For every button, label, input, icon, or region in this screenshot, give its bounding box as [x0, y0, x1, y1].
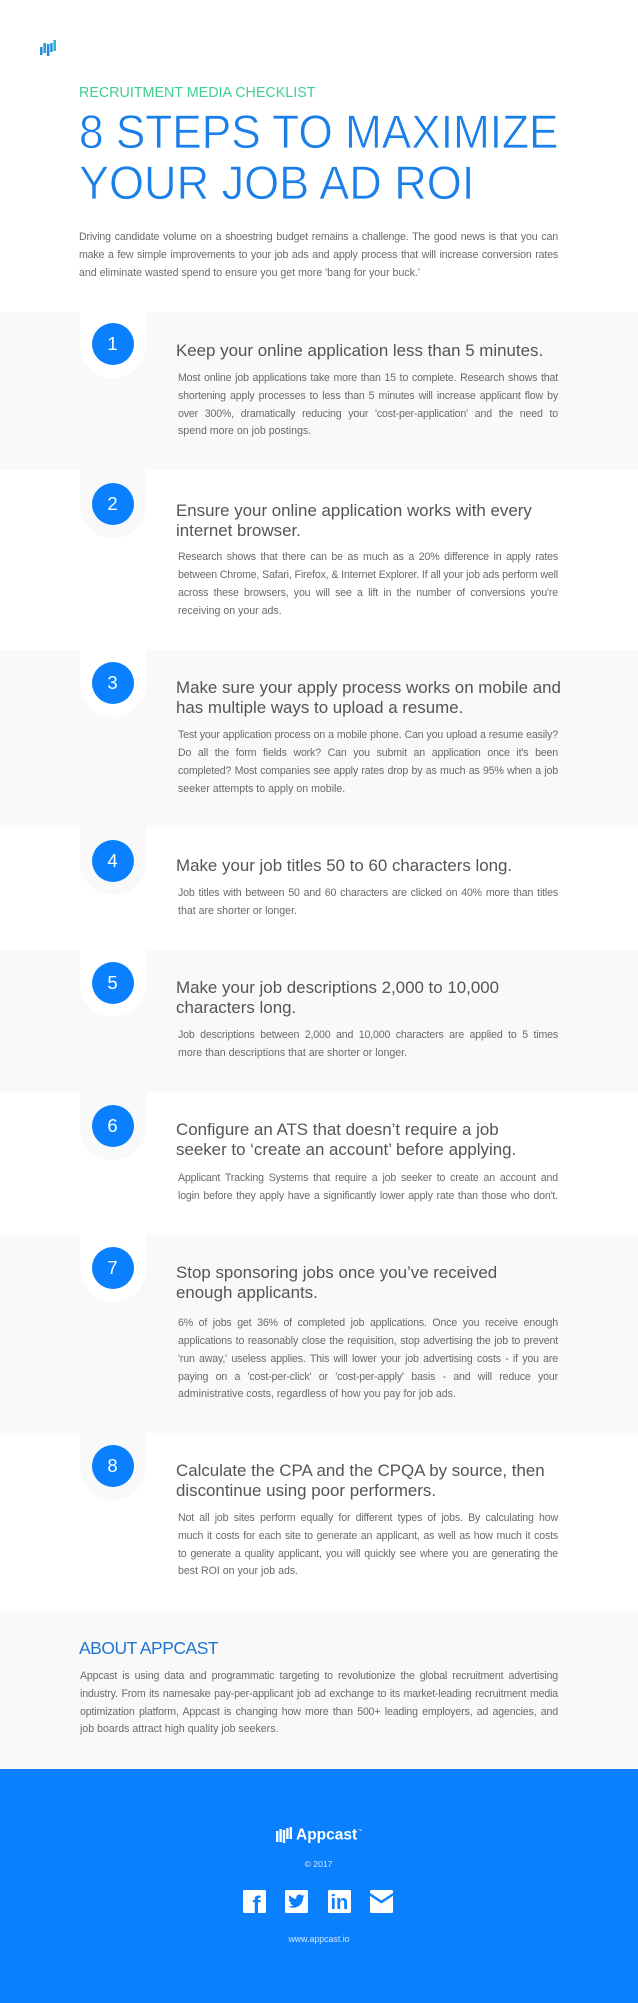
step 8 text: [178, 1512, 558, 1577]
step 7 heading: enough applicants.: [176, 1283, 318, 1302]
step 2 heading: internet browser.: [176, 521, 301, 540]
icon: Facebook: [243, 1890, 266, 1913]
step 8 tab: [80, 1433, 146, 1500]
step 3 text: [178, 729, 558, 795]
panel: step 5: [0, 950, 638, 1092]
step 2 text: receiving on your ads.: [178, 605, 282, 617]
step 6 heading: seeker to ‘create an account’ before applying.: [176, 1140, 516, 1159]
step 8 number badge: 8: [107, 1455, 118, 1476]
footer logo: Appcast: [296, 1827, 357, 1844]
step 7 text: administrative costs, regardless of how you pay for job ads.: [178, 1388, 456, 1400]
panel: step 7: [0, 1235, 638, 1433]
step 1 number badge: 1: [107, 333, 118, 354]
icon: Twitter: [285, 1890, 308, 1913]
step 7 number badge: 7: [107, 1257, 118, 1278]
step 7 heading: [176, 1263, 497, 1302]
step 5 heading: Make your job descriptions 2,000 to 10,000: [176, 978, 499, 997]
step 5 heading: [176, 978, 499, 1017]
step 3 text: Do all the form fields work? Can you submit an application once it's been: [178, 747, 558, 759]
title: YOUR JOB AD ROI: [79, 157, 474, 210]
panel: footer: [0, 1769, 638, 2003]
step 8 text: to generate a quality applicant, you will quickly see where you are generating the: [178, 1548, 558, 1560]
step 4 text: Job titles with between 50 and 60 characters are clicked on 40% more than titles: [178, 887, 558, 899]
step 5 number badge: 5: [107, 972, 118, 993]
step 5 heading: characters long.: [176, 998, 296, 1017]
intro paragraph: make a few simple improvements to your job ads and apply process that will increase conversion rates: [79, 249, 558, 261]
step 6 text: login before they apply have a significantly lower apply rate than those who don't.: [178, 1190, 558, 1202]
step 2 number badge: [92, 483, 134, 525]
panel: step 4: [0, 827, 638, 950]
step 1 tab: [80, 312, 146, 378]
step 3 text: Test your application process on a mobile phone. Can you upload a resume easily?: [178, 729, 558, 741]
intro paragraph: [79, 231, 558, 279]
step 7 number badge: [92, 1247, 134, 1289]
panel: step 8: [0, 1433, 638, 1611]
step 6 tab: [80, 1092, 146, 1160]
step 1 heading: Keep your online application less than 5 minutes.: [176, 341, 543, 360]
step 7 text: 6% of jobs get 36% of completed job applications. Once you receive enough: [178, 1317, 558, 1329]
title: 8 STEPS TO MAXIMIZE: [79, 106, 559, 159]
step 6 heading: [176, 1120, 516, 1159]
step 7 heading: Stop sponsoring jobs once you’ve received: [176, 1263, 497, 1282]
icon: top Appcast logo: [40, 40, 56, 56]
about heading: ABOUT APPCAST: [79, 1638, 218, 1658]
about text: Appcast is using data and programmatic targeting to revolutionize the global recruitment advertising: [80, 1670, 558, 1682]
step 6 text: [178, 1172, 558, 1202]
step 4 number badge: 4: [107, 850, 118, 871]
step 3 number badge: [92, 662, 134, 704]
step 1 text: over 300%, dramatically reducing your 'cost-per-application' and the need to: [178, 408, 558, 420]
step 7 tab: [80, 1235, 146, 1302]
step 7 text: applications to reasonably close the requisition, stop advertising the job to prevent: [178, 1335, 558, 1347]
step 4 tab: [80, 827, 146, 895]
step 3 text: seeker attempts to apply on mobile.: [178, 783, 345, 795]
step 4 text: [178, 887, 558, 917]
step 3 heading: Make sure your apply process works on mobile and: [176, 678, 561, 697]
step 7 text: paying on a 'cost-per-click' or 'cost-per-apply' basis - and will reduce your: [178, 1371, 558, 1383]
step 1 number badge: [92, 323, 134, 365]
step 8 text: Not all job sites perform equally for different types of jobs. By calculating how: [178, 1512, 558, 1524]
step 8 heading: Calculate the CPA and the CPQA by source, then: [176, 1461, 545, 1480]
step 4 text: that are shorter or longer.: [178, 905, 297, 917]
about text: [80, 1670, 558, 1735]
panel: about Appcast: [0, 1611, 638, 1769]
step 5 tab: [80, 950, 146, 1017]
panel: step 2: [0, 470, 638, 650]
step 6 number badge: [92, 1105, 134, 1147]
title: [79, 106, 559, 210]
step 2 text: across these browsers, you will see a lift in the number of conversions you're: [178, 587, 558, 599]
about text: job boards attract high quality job seekers.: [80, 1723, 278, 1735]
step 8 heading: discontinue using poor performers.: [176, 1481, 436, 1500]
step 7 text: [178, 1317, 558, 1400]
panel: step 6: [0, 1092, 638, 1235]
step 8 text: best ROI on your job ads.: [178, 1565, 298, 1577]
step 7 text: 'run away,' useless applies. This will lower your job advertising costs - if you are: [178, 1353, 558, 1365]
step 2 text: Research shows that there can be as much as a 20% difference in apply rates: [178, 551, 558, 563]
step 1 text: Most online job applications take more than 15 to complete. Research shows that: [178, 372, 558, 384]
step 3 heading: [176, 678, 561, 717]
copyright: © 2017: [305, 1859, 332, 1869]
step 1 text: spend more on job postings.: [178, 425, 311, 437]
step 4 number badge: [92, 840, 134, 882]
step 2 tab: [80, 470, 146, 538]
panel: step 1: [0, 312, 638, 470]
step 3 text: completed? Most companies see apply rates drop by as much as 95% when a job: [178, 765, 558, 777]
step 6 number badge: 6: [107, 1115, 118, 1136]
step 5 text: more than descriptions that are shorter or longer.: [178, 1047, 407, 1059]
step 5 text: [178, 1029, 558, 1059]
intro paragraph: Driving candidate volume on a shoestring budget remains a challenge. The good news is that you can: [79, 231, 558, 243]
step 2 text: [178, 551, 558, 617]
step 6 text: Applicant Tracking Systems that require a job seeker to create an account and: [178, 1172, 558, 1184]
icon: email: [370, 1890, 393, 1913]
step 2 number badge: 2: [107, 493, 118, 514]
eyebrow label: RECRUITMENT MEDIA CHECKLIST: [79, 85, 315, 101]
step 3 tab: [80, 650, 146, 717]
step 4 heading: Make your job titles 50 to 60 characters long.: [176, 856, 512, 875]
about text: industry. From its namesake pay-per-applicant job ad exchange to its market-leading recruitment media: [80, 1688, 558, 1700]
step 3 number badge: 3: [107, 672, 118, 693]
step 2 heading: Ensure your online application works with every: [176, 501, 532, 520]
step 2 heading: [176, 501, 532, 540]
step 3 heading: has multiple ways to upload a resume.: [176, 698, 463, 717]
step 8 text: much it costs for each site to generate an applicant, as well as how much it costs: [178, 1530, 558, 1542]
step 8 heading: [176, 1461, 545, 1500]
intro paragraph: and eliminate wasted spend to ensure you get more 'bang for your buck.': [79, 267, 420, 279]
step 2 text: between Chrome, Safari, Firefox, & Internet Explorer. If all your job ads perform well: [178, 569, 558, 581]
step 1 text: [178, 372, 558, 437]
step 5 text: Job descriptions between 2,000 and 10,000 characters are applied to 5 times: [178, 1029, 558, 1041]
website URL: www.appcast.io: [288, 1934, 350, 1944]
footer logo: ™: [358, 1828, 362, 1833]
step 1 text: shortening apply processes to less than 5 minutes will increase applicant flow by: [178, 390, 558, 402]
panel: step 3: [0, 650, 638, 827]
step 6 heading: Configure an ATS that doesn’t require a job: [176, 1120, 499, 1139]
step 5 number badge: [92, 962, 134, 1004]
about text: optimization platform, Appcast is changing how more than 500+ leading employers, ad agencies, and: [80, 1706, 558, 1718]
step 8 number badge: [92, 1445, 134, 1487]
